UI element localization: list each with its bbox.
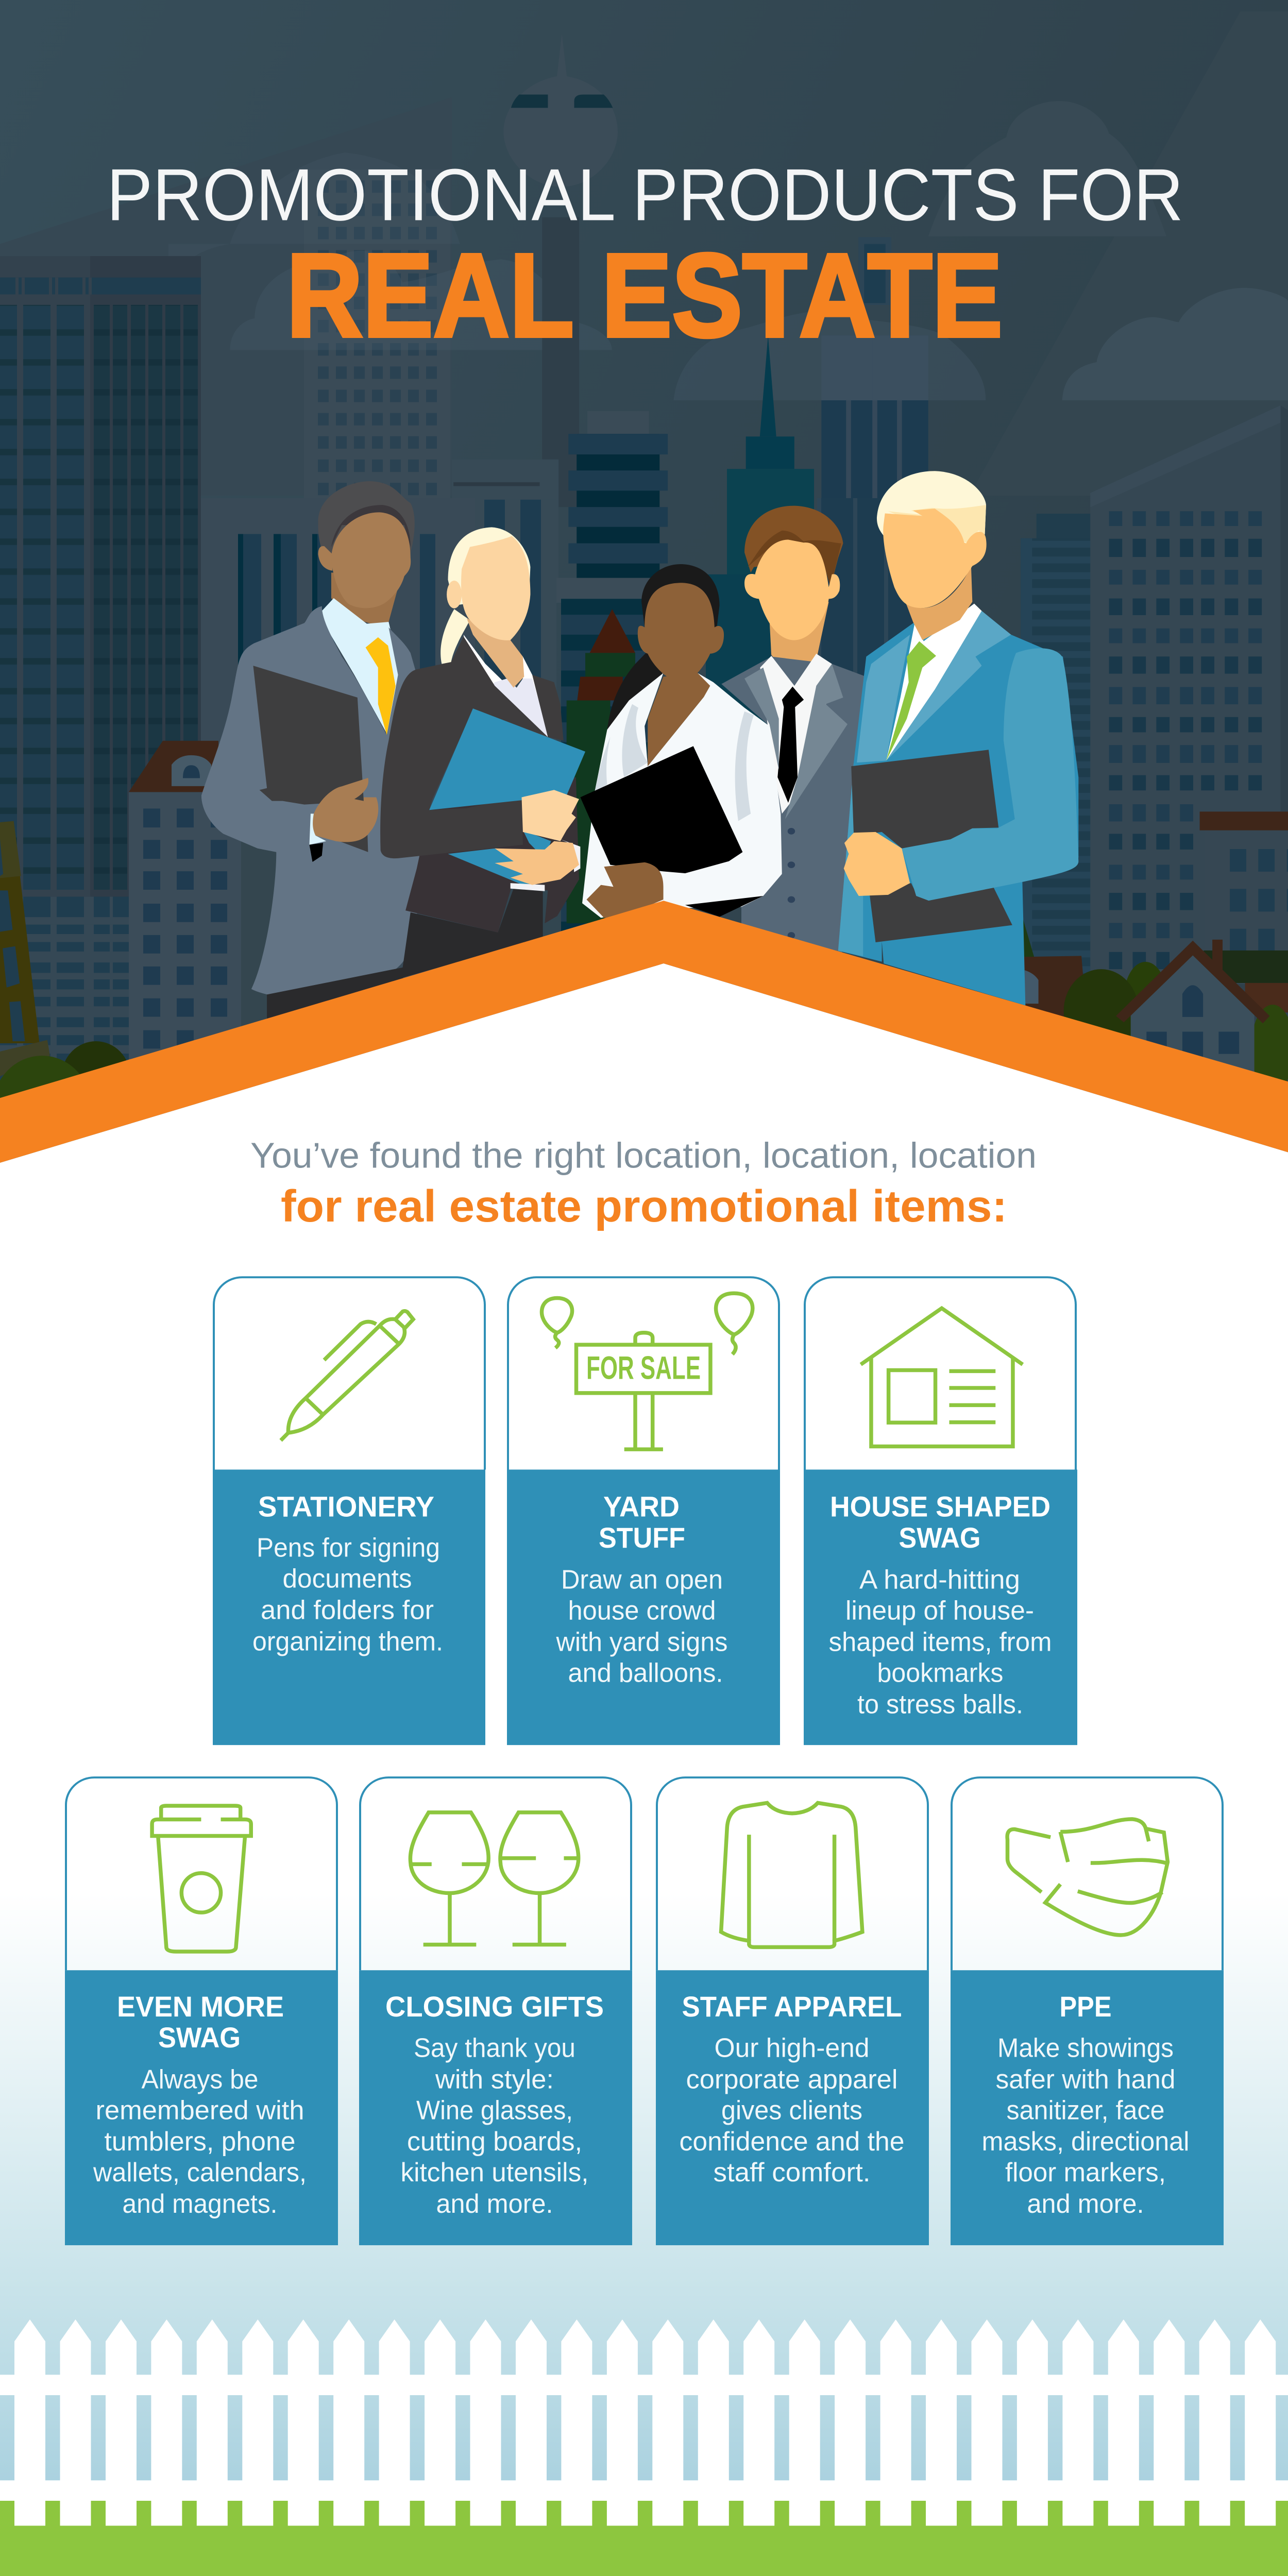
grass ground	[0, 2501, 1288, 2576]
icon: face mask	[1007, 1819, 1168, 1935]
group of five real estate agents	[201, 471, 1078, 1033]
back tower with window grid	[304, 170, 450, 668]
panel: yard stuff	[507, 1277, 780, 1745]
tall right tower	[821, 335, 928, 598]
icon: house	[861, 1308, 1023, 1447]
panel: closing gifts: and more.	[436, 2189, 553, 2219]
panel: staff apparel: corporate apparel	[686, 2064, 897, 2094]
panel: house shaped swag	[804, 1277, 1077, 1745]
lower page background	[0, 963, 1288, 2576]
icon: for sale sign with balloons	[541, 1293, 753, 1449]
panel: staff apparel: confidence and the	[679, 2127, 904, 2157]
agent 4: middle man in grey suit	[721, 506, 866, 960]
panel: stationery: STATIONERY	[258, 1490, 434, 1523]
panel: house shaped swag: bookmarks	[877, 1658, 1004, 1688]
panel: even more swag: Always be	[142, 2064, 259, 2094]
panel: staff apparel: staff comfort.	[713, 2158, 870, 2188]
panel: yard stuff: house crowd	[568, 1596, 716, 1625]
panel: staff apparel: gives clients	[721, 2095, 862, 2125]
icon: wine glasses	[410, 1812, 579, 1944]
grey low building	[452, 460, 558, 598]
mid buildings behind figures	[201, 498, 922, 1096]
header city background	[0, 0, 1288, 1171]
panel: ppe: masks, directional	[981, 2127, 1189, 2157]
panel: even more swag: remembered with	[95, 2095, 304, 2125]
panel: ppe: and more.	[1027, 2189, 1144, 2219]
panel: even more swag: EVEN MORE	[117, 1991, 284, 2023]
panel: house shaped swag: lineup of house-	[845, 1596, 1034, 1625]
agent 3: woman in white shirt with black folder	[580, 564, 782, 918]
clock tower	[567, 609, 635, 923]
icon: long sleeve shirt	[721, 1803, 862, 1947]
panel: house shaped swag: SWAG	[899, 1522, 980, 1554]
panel: ppe	[951, 1777, 1224, 2245]
panel: yard stuff: and balloons.	[568, 1658, 723, 1688]
panel: even more swag: wallets, calendars,	[93, 2158, 307, 2188]
panel: ppe: safer with hand	[995, 2064, 1176, 2094]
orange roof	[0, 901, 1288, 1163]
panel: yard stuff: STUFF	[599, 1522, 685, 1554]
icon: tumbler	[152, 1806, 251, 1952]
title	[107, 154, 1183, 362]
panel: even more swag: tumblers, phone	[105, 2127, 295, 2157]
panel: stationery: Pens for signing	[257, 1533, 440, 1563]
panel: closing gifts: Say thank you	[414, 2033, 575, 2063]
teal spire	[760, 335, 776, 436]
agent 2: blonde woman in dark jacket	[380, 527, 585, 978]
panel: closing gifts	[359, 1777, 632, 2245]
panel: yard stuff: YARD	[603, 1490, 680, 1523]
panel: house shaped swag: to stress balls.	[857, 1689, 1023, 1719]
panel: even more swag: SWAG	[158, 2022, 241, 2054]
left tower	[0, 256, 201, 1106]
agent 2 hands	[495, 790, 580, 891]
agent 5: blue suit	[838, 471, 1078, 1006]
panel: staff apparel: STAFF APPAREL	[682, 1991, 902, 2023]
panel: staff apparel	[656, 1777, 929, 2245]
panel: closing gifts: Wine glasses,	[416, 2095, 573, 2125]
panel: house shaped swag: shaped items, from	[829, 1627, 1052, 1657]
panel: closing gifts: with style:	[435, 2064, 554, 2094]
panel: house shaped swag: HOUSE SHAPED	[830, 1490, 1050, 1523]
striped tower	[587, 411, 649, 434]
intro text: You’ve found the right location, location, location	[250, 1136, 1037, 1176]
intro text	[250, 1136, 1037, 1231]
panel: even more swag: and magnets.	[123, 2189, 278, 2219]
panel: ppe: PPE	[1059, 1991, 1111, 2023]
panel: yard stuff: FOR SALE	[586, 1349, 701, 1386]
agent 1: grey suit	[201, 481, 423, 1033]
panel: ppe: sanitizer, face	[1006, 2095, 1164, 2125]
panel: stationery	[213, 1277, 485, 1745]
panel: closing gifts: CLOSING GIFTS	[385, 1991, 604, 2023]
left brown roof building	[129, 741, 277, 1101]
back clouds and plane silhouette	[0, 11, 1288, 496]
translucent clouds	[168, 152, 1288, 598]
panel: closing gifts: kitchen utensils,	[401, 2158, 589, 2188]
white picket fence	[0, 2319, 1288, 2526]
olive scaffold and left trees	[0, 821, 130, 1163]
panel: yard stuff: with yard signs	[556, 1627, 727, 1657]
panel: ppe: Make showings	[997, 2033, 1174, 2063]
panel: ppe: floor markers,	[1005, 2158, 1166, 2188]
panel: even more swag	[65, 1777, 338, 2245]
panel: staff apparel: Our high-end	[714, 2033, 870, 2063]
panel: house shaped swag: A hard-hitting	[859, 1565, 1020, 1595]
panel: stationery: documents	[282, 1564, 412, 1594]
right buildings and house	[1021, 405, 1288, 1091]
title: PROMOTIONAL PRODUCTS FOR	[107, 154, 1183, 236]
cloud centre	[673, 311, 986, 400]
panel: stationery: and folders for	[261, 1595, 434, 1625]
panel: yard stuff: Draw an open	[561, 1565, 723, 1595]
intro text: for real estate promotional items:	[281, 1181, 1007, 1231]
title: REAL ESTATE	[286, 229, 1003, 362]
icon: pen	[281, 1311, 413, 1440]
panel: closing gifts: cutting boards,	[407, 2127, 582, 2157]
panel: stationery: organizing them.	[252, 1626, 443, 1656]
